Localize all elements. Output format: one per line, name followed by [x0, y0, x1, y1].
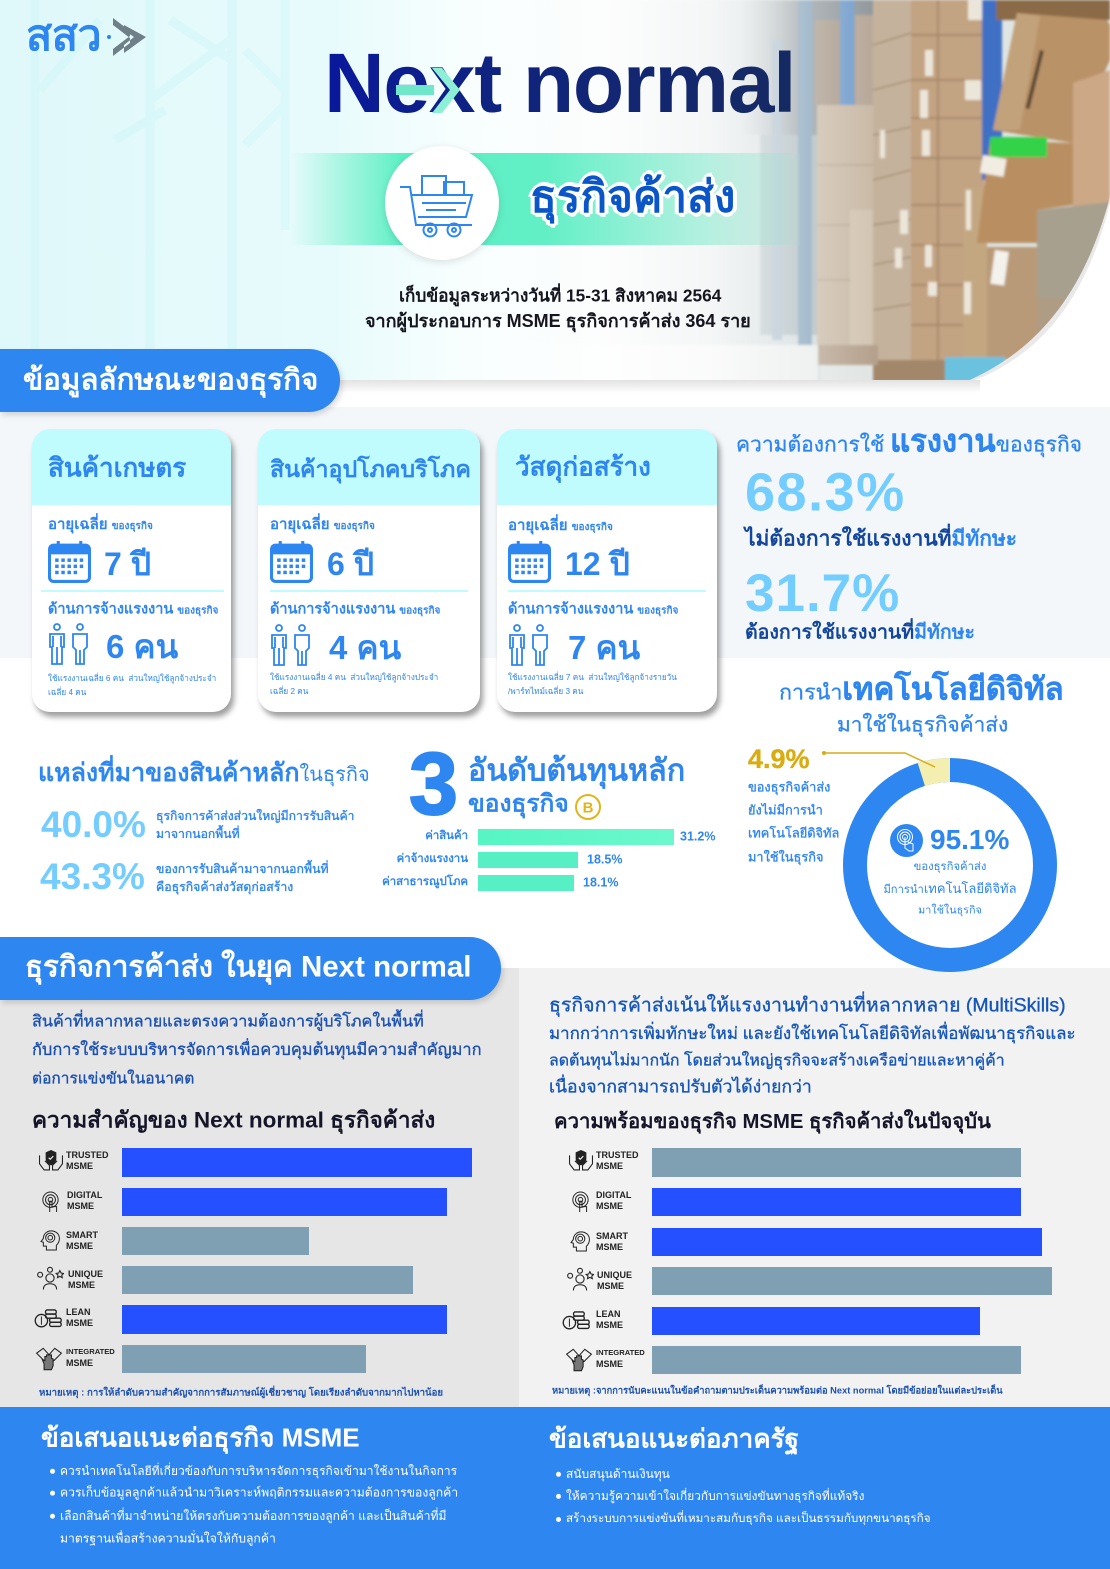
- icon: coin: B: [583, 800, 594, 816]
- row: integrated: MSME: [66, 1358, 93, 1368]
- logo: [26, 12, 146, 60]
- callout: 4.9 percent: ยังไม่มีการนำ: [748, 802, 823, 817]
- heading: top 3 costs: ของธุรกิจ: [468, 790, 569, 817]
- row: lean: [562, 1307, 980, 1335]
- logo: สสว: [26, 12, 101, 60]
- donut centre: 95.1 percent: [883, 824, 1017, 917]
- recommendation: government: ข้อเสนอแนะต่อภาครัฐ: [549, 1423, 799, 1453]
- row: unique: UNIQUE: [68, 1269, 103, 1279]
- text block: right intro: ลดต้นทุนไม่มากนัก โดยส่วนใหญ่ธุรกิจจะสร้างเครือข่ายและหาคู่ค้า: [549, 1052, 1005, 1069]
- row: lean: MSME: [66, 1318, 93, 1328]
- subtitle: wholesale business: ธุรกิจค้าส่ง: [530, 173, 735, 222]
- icon: digital touch: [890, 824, 923, 857]
- heading: readiness chart: ความพร้อมของธุรกิจ MSME ธุรกิจค้าส่งในปัจจุบัน: [554, 1111, 991, 1133]
- row: integrated: INTEGRATED: [66, 1347, 115, 1356]
- hero photo background: [0, 0, 1110, 380]
- recommendation: MSME: ควรนำเทคโนโลยีที่เกี่ยวข้องกับการบริหารจัดการธุรกิจเข้ามาใช้งานในกิจการ: [60, 1464, 457, 1478]
- panel: source of goods: [38, 755, 370, 897]
- text block: right intro: [549, 991, 1076, 1096]
- heading: digital technology: มาใช้ในธุรกิจค้าส่ง: [837, 714, 1008, 737]
- bar chart: main costs: 18.5%: [587, 852, 622, 866]
- bar chart: main costs: 31.2%: [680, 830, 715, 844]
- card: consumer goods: [258, 429, 480, 712]
- panel: importance background: [0, 968, 519, 1407]
- panel: source of goods: ธุรกิจการค้าส่งส่วนใหญ่มีการรับสินค้า: [156, 809, 354, 823]
- icon: shopping cart: [385, 146, 499, 260]
- card: construction materials: ใช้แรงงานเฉลี่ย 7 คน ส่วนใหญ่ใช้ลูกจ้างรายวัน: [508, 673, 677, 682]
- row: unique: UNIQUE: [597, 1270, 632, 1280]
- row: trusted: [39, 1148, 472, 1177]
- callout: 4.9 percent: มาใช้ในธุรกิจ: [748, 849, 823, 864]
- text block: left intro: ต่อการแข่งขันในอนาคต: [32, 1071, 194, 1088]
- row: integrated: [36, 1345, 366, 1373]
- bar chart: main costs: 18.1%: [583, 876, 618, 890]
- bar chart: importance of next normal: [34, 1148, 472, 1373]
- section heading: next normal era: ธุรกิจการค้าส่ง ในยุค Next normal: [25, 950, 471, 983]
- callout: 4.9 percent: ของธุรกิจค้าส่ง: [748, 779, 830, 794]
- row: trusted: MSME: [596, 1160, 623, 1170]
- title: Next normal: [324, 36, 795, 130]
- heading: digital technology: [779, 670, 1064, 737]
- panel: labour demand: [736, 423, 1082, 643]
- note: readiness: หมายเหตุ :จากการนับคะแนนในข้อคำถามตามประเด็นความพร้อมต่อ Next normal โดยมีข้อย่อยในแต่ละประเด็น: [552, 1385, 1003, 1395]
- band shadow under hero: [340, 380, 980, 393]
- recommendation: government: [549, 1423, 931, 1525]
- heading: top 3 costs: อันดับต้นทุนหลัก: [468, 754, 685, 788]
- row: lean: MSME: [596, 1320, 623, 1330]
- callout: 4.9 percent: 4.9%: [748, 744, 810, 774]
- bar chart: readiness of MSME: [562, 1148, 1052, 1374]
- row: smart: [570, 1228, 1042, 1256]
- row: lean: LEAN: [66, 1307, 90, 1317]
- card: consumer goods: อายุเฉลี่ย ของธุรกิจ: [270, 516, 375, 533]
- heading: top 3 costs: 3: [409, 734, 458, 833]
- row: trusted: [569, 1148, 1021, 1177]
- heading: top 3 costs: [409, 734, 685, 833]
- card: agricultural goods: ใช้แรงงานเฉลี่ย 6 คน ส่วนใหญ่ใช้ลูกจ้างประจำ: [48, 674, 216, 683]
- heading: importance chart: ความสำคัญของ Next normal ธุรกิจค้าส่ง: [32, 1108, 435, 1132]
- row: unique: [567, 1267, 1052, 1295]
- row: smart: SMART: [596, 1231, 628, 1241]
- row: integrated: INTEGRATED: [596, 1348, 645, 1357]
- recommendation: MSME: เลือกสินค้าที่มาจำหน่ายให้ตรงกับความต้องการของลูกค้า และเป็นสินค้าที่มี: [60, 1509, 446, 1523]
- row: smart: MSME: [596, 1242, 623, 1252]
- row: digital: [42, 1188, 447, 1216]
- row: unique: [37, 1266, 413, 1294]
- recommendation: MSME: [41, 1422, 458, 1546]
- survey note: เก็บข้อมูลระหว่างวันที่ 15-31 สิงหาคม 2564: [399, 286, 721, 306]
- recommendation: MSME: มาตรฐานเพื่อสร้างความมั่นใจให้กับลูกค้า: [60, 1532, 276, 1546]
- recommendation: government: สนับสนุนด้านเงินทุน: [566, 1467, 670, 1481]
- card: agricultural goods: 6 คน: [106, 628, 178, 665]
- row: digital: DIGITAL: [67, 1190, 102, 1200]
- card: consumer goods: สินค้าอุปโภคบริโภค: [270, 456, 471, 482]
- section heading: business profile: [0, 349, 340, 412]
- panel: labour demand: ต้องการใช้แรงงานที่มีทักษะ: [745, 621, 975, 643]
- survey note: [365, 283, 751, 332]
- donut centre: 95.1 percent: มาใช้ในธุรกิจ: [918, 905, 982, 917]
- callout: 4.9 percent: [748, 744, 839, 866]
- donut centre: 95.1 percent: มีการนำเทคโนโลยีดิจิทัล: [883, 881, 1017, 896]
- row: digital: DIGITAL: [596, 1190, 631, 1200]
- survey note: จากผู้ประกอบการ MSME ธุรกิจการค้าส่ง 364 ราย: [365, 311, 751, 331]
- bar chart: main costs: ค่าสินค้า: [425, 830, 468, 842]
- row: smart: [40, 1227, 309, 1255]
- card: agricultural goods: 7 ปี: [104, 546, 151, 582]
- donut centre: 95.1 percent: ของธุรกิจค้าส่ง: [914, 861, 986, 873]
- row: digital: [572, 1188, 1021, 1216]
- panel: labour demand: ไม่ต้องการใช้แรงงานที่มีทักษะ: [745, 527, 1017, 550]
- heading: digital technology: การนำเทคโนโลยีดิจิทัล: [779, 671, 1064, 706]
- panel: source of goods: คือธุรกิจค้าส่งวัสดุก่อสร้าง: [156, 880, 293, 894]
- card: consumer goods: เฉลี่ย 2 คน: [270, 687, 308, 696]
- text block: left intro: [32, 1009, 482, 1088]
- row: unique: MSME: [597, 1280, 624, 1290]
- panel: labour demand: ความต้องการใช้ แรงงานของธุรกิจ: [736, 423, 1082, 458]
- panel: source of goods: มาจากนอกพื้นที่: [156, 827, 240, 841]
- panel: source of goods: 40.0%: [41, 804, 146, 845]
- section background: business profile: [0, 407, 1110, 658]
- card: agricultural goods: เฉลี่ย 4 คน: [48, 688, 86, 697]
- text block: right intro: ธุรกิจการค้าส่งเน้นให้แรงงานทำงานที่หลากหลาย (MultiSkills): [549, 994, 1066, 1016]
- row: lean: [34, 1305, 447, 1334]
- card: construction materials: วัสดุก่อสร้าง: [515, 451, 651, 481]
- card: construction materials: ด้านการจ้างแรงงาน ของธุรกิจ: [508, 601, 678, 617]
- row: smart: SMART: [66, 1230, 98, 1240]
- section heading: next normal era: [0, 937, 501, 1000]
- panel: source of goods: ของการรับสินค้ามาจากนอกพื้นที่: [156, 862, 329, 876]
- donut chart: [822, 751, 1057, 972]
- row: trusted: TRUSTED: [596, 1150, 638, 1160]
- text block: left intro: กับการใช้ระบบบริหารจัดการเพื่อควบคุมต้นทุนมีความสำคัญมาก: [32, 1041, 482, 1059]
- section heading: business profile: ข้อมูลลักษณะของธุรกิจ: [23, 363, 318, 396]
- card: construction materials: 7 คน: [568, 629, 640, 666]
- panel: recommendations: [0, 1407, 1110, 1569]
- bar chart: main costs: ค่าสาธารณูปโภค: [382, 876, 468, 888]
- card: consumer goods: ใช้แรงงานเฉลี่ย 4 คน ส่วนใหญ่ใช้ลูกจ้างประจำ: [270, 673, 438, 682]
- note: importance: หมายเหตุ : การให้ลำดับความสำคัญจากการสัมภาษณ์ผู้เชี่ยวชาญ โดยเรียงลำดับจากมากไปหาน้อย: [39, 1387, 443, 1398]
- card: agricultural goods: อายุเฉลี่ย ของธุรกิจ: [48, 516, 153, 533]
- card: agricultural goods: ด้านการจ้างแรงงาน ของธุรกิจ: [48, 601, 218, 617]
- recommendation: MSME: ควรเก็บข้อมูลลูกค้าแล้วนำมาวิเคราะห์พฤติกรรมและความต้องการของลูกค้า: [60, 1486, 458, 1500]
- row: lean: LEAN: [596, 1309, 620, 1319]
- text block: right intro: เนื่องจากสามารถปรับตัวได้ง่ายกว่า: [549, 1076, 812, 1096]
- bar chart: main costs: [382, 829, 716, 891]
- card: construction materials: /พาร์ทไทม์เฉลี่ย 3 คน: [508, 687, 583, 696]
- card: consumer goods: 6 ปี: [327, 546, 374, 582]
- recommendation: MSME: ข้อเสนอแนะต่อธุรกิจ MSME: [41, 1422, 360, 1452]
- text block: left intro: สินค้าที่หลากหลายและตรงความต้องการผู้บริโภคในพื้นที่: [32, 1012, 424, 1030]
- panel: source of goods: 43.3%: [40, 856, 145, 897]
- callout: 4.9 percent: เทคโนโลยีดิจิทัล: [748, 825, 839, 840]
- card: construction materials: อายุเฉลี่ย ของธุรกิจ: [508, 517, 613, 534]
- card: construction materials: 12 ปี: [565, 546, 630, 582]
- donut centre: 95.1 percent: 95.1%: [930, 824, 1009, 855]
- recommendation: government: สร้างระบบการแข่งขันที่เหมาะสมกับธุรกิจ และเป็นธรรมกับทุกขนาดธุรกิจ: [566, 1512, 931, 1525]
- icon: coin: [575, 794, 601, 820]
- card: consumer goods: ด้านการจ้างแรงงาน ของธุรกิจ: [270, 601, 440, 617]
- card: construction materials: [497, 429, 717, 712]
- row: integrated: [566, 1346, 1021, 1374]
- row: smart: MSME: [66, 1240, 93, 1250]
- panel: labour demand: 68.3%: [745, 463, 906, 523]
- card: agricultural goods: [32, 429, 231, 712]
- panel: source of goods: แหล่งที่มาของสินค้าหลักในธุรกิจ: [38, 759, 370, 787]
- row: digital: MSME: [596, 1200, 623, 1210]
- row: trusted: MSME: [66, 1160, 93, 1170]
- mint band: [290, 153, 800, 245]
- row: unique: MSME: [68, 1280, 95, 1290]
- text block: right intro: มากกว่าการเพิ่มทักษะใหม่ และยังใช้เทคโนโลยีดิจิทัลเพื่อพัฒนาธุรกิจและ: [549, 1024, 1076, 1043]
- card: agricultural goods: สินค้าเกษตร: [48, 452, 186, 482]
- panel: labour demand: 31.7%: [745, 564, 900, 623]
- card: consumer goods: 4 คน: [329, 629, 401, 666]
- row: integrated: MSME: [596, 1358, 623, 1368]
- bar chart: main costs: ค่าจ้างแรงงาน: [397, 853, 468, 865]
- row: digital: MSME: [67, 1200, 94, 1210]
- row: trusted: TRUSTED: [66, 1150, 108, 1160]
- recommendation: government: ให้ความรู้ความเข้าใจเกี่ยวกับการแข่งขันทางธุรกิจที่แท้จริง: [566, 1489, 864, 1503]
- panel: readiness background: [519, 968, 1110, 1407]
